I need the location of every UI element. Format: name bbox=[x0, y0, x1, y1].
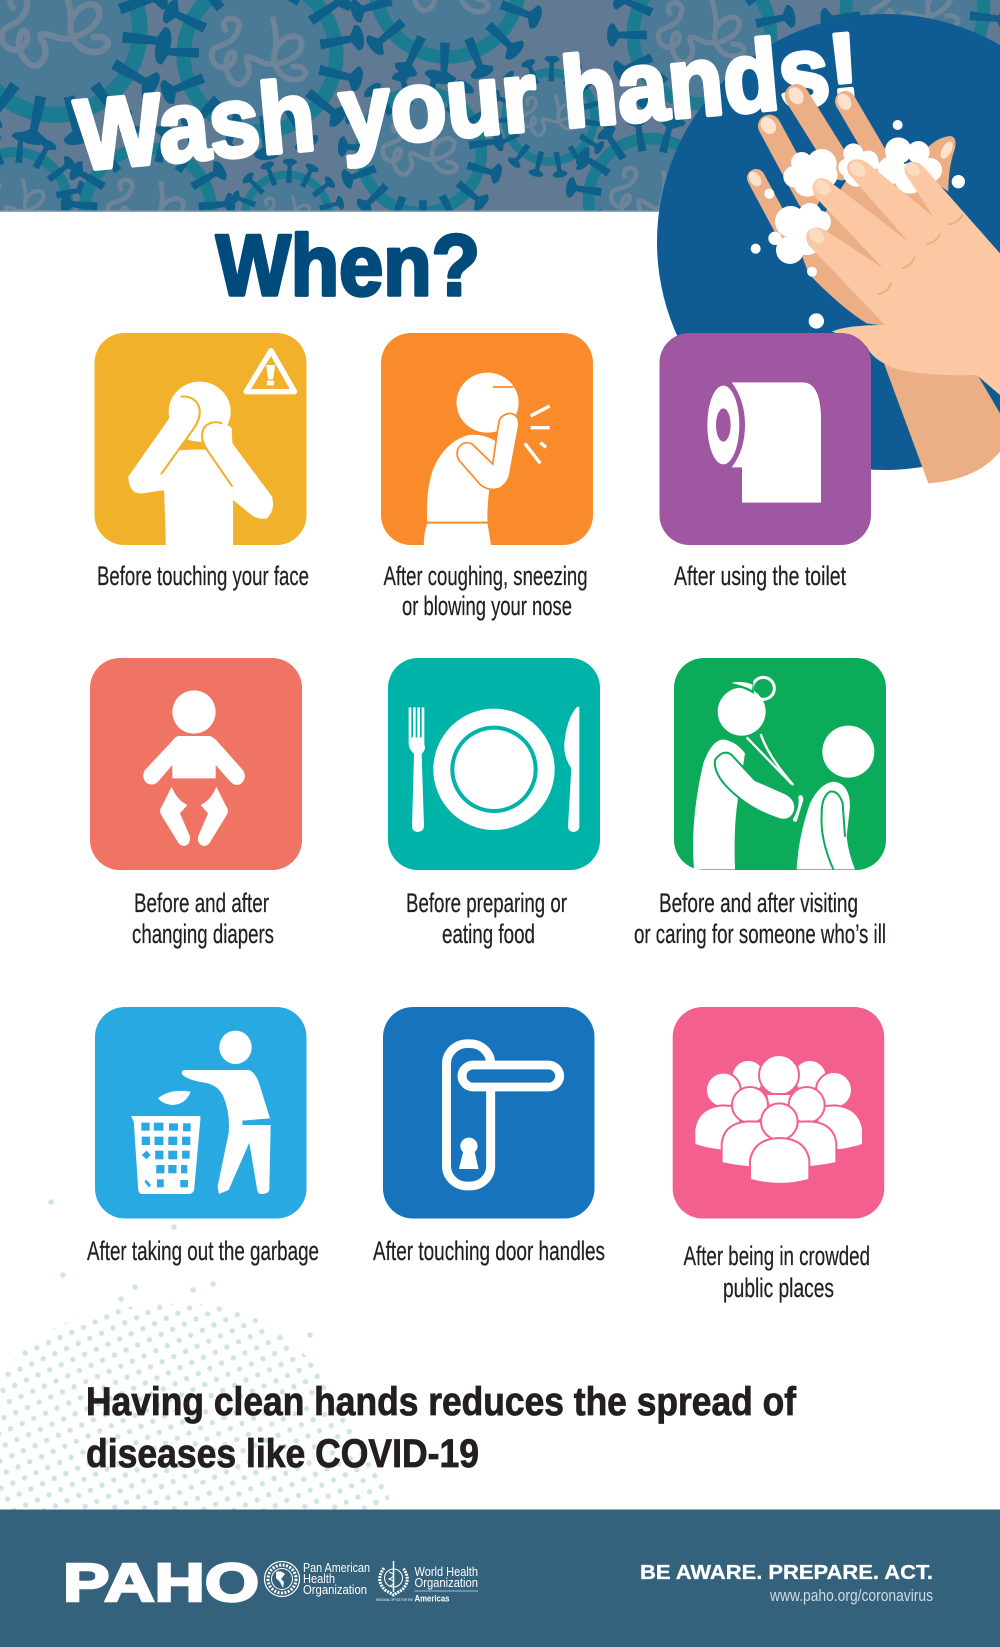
text: World Health Organization Americas bbox=[376, 1564, 478, 1604]
label: after coughing bbox=[384, 561, 588, 621]
label: changing diapers: changing diapers bbox=[132, 919, 274, 949]
panel: touching door handles bbox=[383, 1007, 594, 1218]
text: World Health Organization Americas: World Health bbox=[414, 1564, 478, 1579]
label: preparing food bbox=[406, 888, 567, 949]
text: World Health Organization Americas: REGIONAL OFFICE FOR THE bbox=[376, 1598, 414, 1602]
header virus pattern banner bbox=[0, 0, 1000, 212]
label: after coughing: After coughing, sneezing bbox=[384, 561, 588, 591]
icon: person coughing into elbow bbox=[424, 373, 550, 545]
icon: toilet paper roll bbox=[707, 382, 821, 503]
text: Pan American Health Organization: Organization bbox=[303, 1583, 367, 1597]
key message: Having clean hands reduces the spread of bbox=[86, 1380, 797, 1424]
panel: preparing food bbox=[388, 658, 600, 870]
slogan: BE AWARE. PREPARE. ACT. bbox=[640, 1562, 933, 1584]
label: visiting someone ill: or caring for someone who’s ill bbox=[634, 919, 886, 949]
PAHO wordmark: PAHO bbox=[63, 1553, 259, 1613]
panel: crowded public places bbox=[673, 1007, 884, 1218]
text: Pan American Health Organization: Health bbox=[303, 1572, 335, 1586]
text: World Health Organization Americas: Organization bbox=[414, 1575, 478, 1590]
heading: When?: When? bbox=[216, 218, 480, 314]
logo: WHO emblem bbox=[380, 1561, 407, 1595]
panel: taking out the garbage bbox=[95, 1007, 306, 1218]
label: taking out the garbage: After taking out the garbage bbox=[87, 1236, 319, 1266]
key message bbox=[86, 1380, 797, 1476]
logo: PAHO seal bbox=[264, 1562, 300, 1596]
label: touching door handles: After touching door handles bbox=[373, 1236, 605, 1266]
title: Wash your hands! bbox=[71, 12, 864, 192]
panel: after using the toilet bbox=[660, 333, 871, 545]
icon: plate fork and knife bbox=[409, 707, 579, 832]
icon: crowd of people bbox=[694, 1055, 863, 1184]
label: crowded public places bbox=[684, 1241, 870, 1303]
label: changing diapers bbox=[132, 888, 274, 949]
label: crowded public places: public places bbox=[723, 1273, 834, 1303]
key message: diseases like COVID-19 bbox=[86, 1432, 479, 1476]
label: visiting someone ill: Before and after visiting bbox=[659, 888, 858, 918]
label: after coughing: or blowing your nose bbox=[402, 591, 572, 621]
icon: person with waste basket bbox=[131, 1031, 271, 1194]
soap foam bbox=[751, 120, 965, 329]
website: www.paho.org/coronavirus bbox=[769, 1587, 933, 1605]
icon: door handle bbox=[447, 1044, 560, 1186]
front hand bbox=[806, 159, 1000, 395]
text: World Health Organization Americas: Americas bbox=[414, 1594, 450, 1604]
label: after using the toilet: After using the toilet bbox=[674, 561, 846, 591]
icon: doctor and patient bbox=[693, 677, 874, 869]
icon: person touching face with warning sign bbox=[128, 351, 294, 545]
panel: changing diapers bbox=[90, 658, 302, 870]
label: preparing food: Before preparing or bbox=[406, 888, 567, 918]
back hand bbox=[746, 84, 1000, 483]
illustration: washing hands bbox=[746, 84, 1000, 483]
icon: baby bbox=[143, 690, 245, 846]
blue circle behind hands bbox=[657, 14, 1000, 470]
panel: before touching your face bbox=[94, 333, 306, 545]
panel: visiting someone ill bbox=[674, 658, 886, 870]
label: before touching your face: Before touching your face bbox=[97, 561, 309, 591]
text: Pan American Health Organization: Pan American bbox=[303, 1561, 370, 1575]
label: visiting someone ill bbox=[634, 888, 886, 949]
panel: after coughing bbox=[381, 333, 593, 545]
label: preparing food: eating food bbox=[442, 919, 535, 949]
footer band bbox=[0, 1510, 1000, 1647]
dotted decoration bottom left bbox=[0, 1199, 392, 1510]
label: crowded public places: After being in crowded bbox=[684, 1241, 870, 1271]
text: Pan American Health Organization bbox=[303, 1561, 370, 1597]
label: changing diapers: Before and after bbox=[134, 888, 269, 918]
